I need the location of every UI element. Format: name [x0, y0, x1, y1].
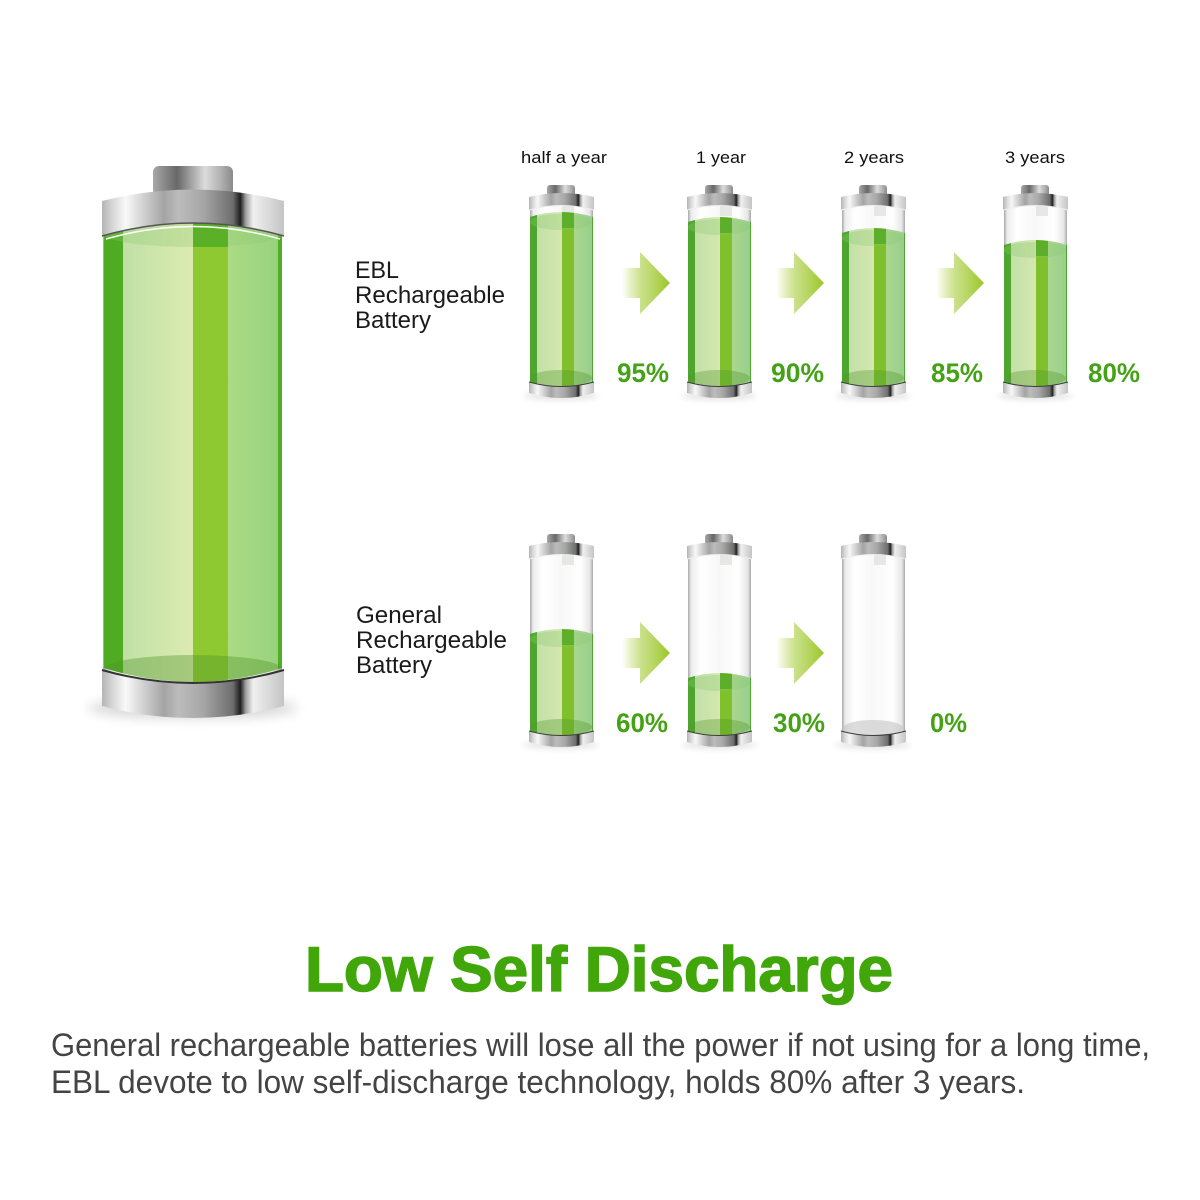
label: EBL rechargeable battery [355, 257, 505, 334]
time label: half a year: half a year [521, 148, 607, 167]
arrow [776, 252, 824, 314]
arrow [622, 252, 670, 314]
battery: general 1 year 30% [681, 534, 757, 749]
battery: EBL 3 years 80% [997, 185, 1073, 400]
battery: EBL 1 year 90% [681, 185, 757, 400]
time label: 1 year: 1 year [696, 148, 746, 167]
label: general rechargeable battery: Battery [356, 652, 432, 679]
large battery illustration [88, 166, 298, 718]
battery: EBL half a year 95% [523, 185, 599, 400]
arrow [622, 622, 670, 684]
battery: general half a year 60% [523, 534, 599, 749]
label: general rechargeable battery: Rechargeable [356, 627, 507, 654]
label: EBL rechargeable battery: Battery [355, 307, 431, 334]
battery: general 2 years 0% [835, 534, 911, 749]
title: Low Self Discharge [305, 935, 893, 1005]
value: 90%: 90% [771, 358, 824, 388]
arrow [936, 252, 984, 314]
value: 95%: 95% [617, 358, 669, 388]
arrow [776, 622, 824, 684]
label: EBL rechargeable battery: EBL [355, 257, 399, 284]
value: 30%: 30% [773, 708, 825, 738]
time label: 2 years: 2 years [844, 148, 904, 167]
label: EBL rechargeable battery: Rechargeable [355, 282, 505, 309]
description text [51, 1027, 1150, 1100]
battery: EBL 2 years 85% [835, 185, 911, 400]
value: 85%: 85% [931, 358, 983, 388]
label: general rechargeable battery [356, 602, 507, 679]
value: 60%: 60% [616, 708, 668, 738]
value: 0%: 0% [930, 708, 967, 738]
description text: General rechargeable batteries will lose all the power if not using for a long time, [51, 1027, 1150, 1063]
label: general rechargeable battery: General [356, 602, 442, 629]
time label: 3 years: 3 years [1005, 148, 1065, 167]
description text: EBL devote to low self-discharge technology, holds 80% after 3 years. [51, 1064, 1025, 1100]
value: 80%: 80% [1088, 358, 1140, 388]
